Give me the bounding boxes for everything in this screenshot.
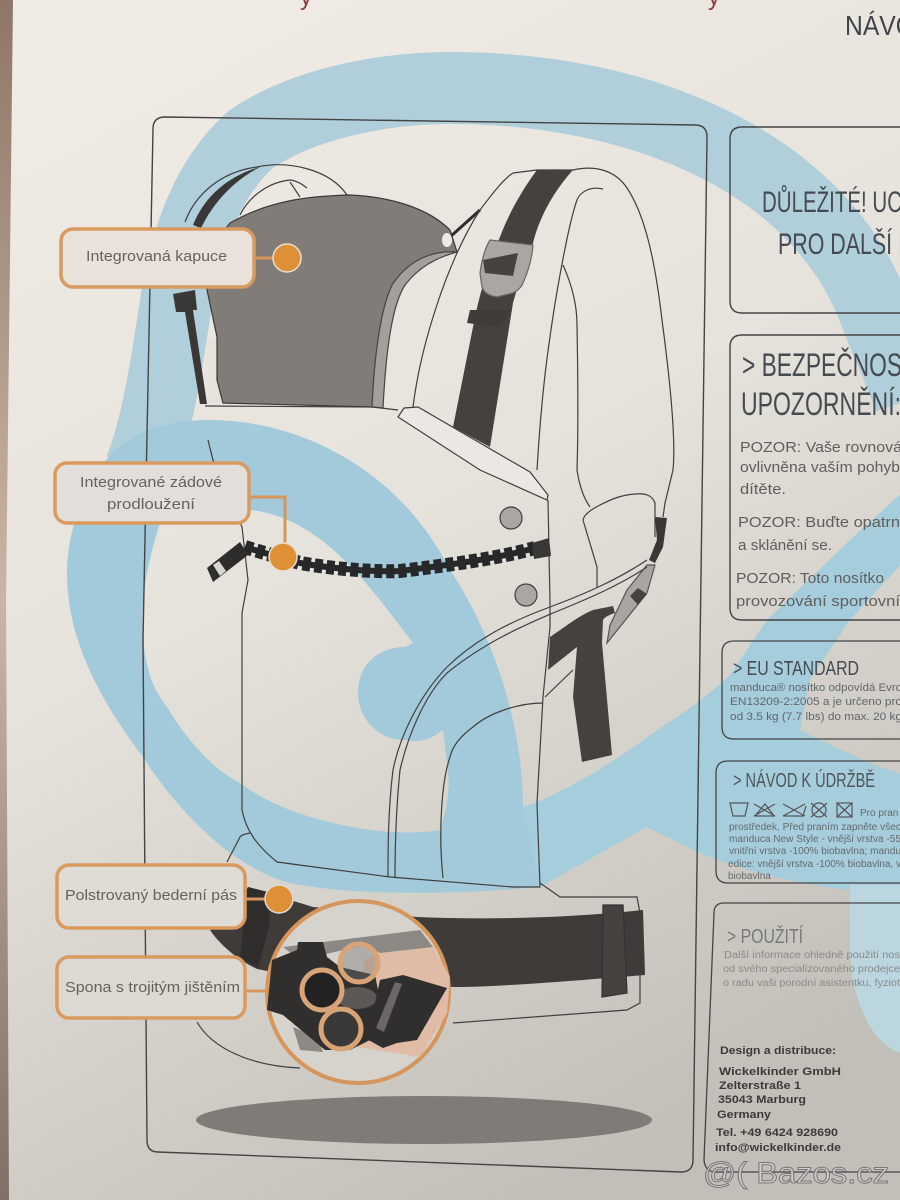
illustration: baby carrier [173, 165, 674, 1068]
side strap top [649, 517, 667, 563]
zipper pull [207, 542, 248, 582]
panel: care instructions: biobavlna [728, 871, 771, 882]
zipper [245, 547, 535, 571]
safety ring: left [302, 970, 342, 1010]
front flap [398, 407, 548, 500]
panel: safety warnings: dítěte. [740, 481, 786, 498]
panel: safety warnings: POZOR: Vaše rovnová [740, 439, 900, 456]
panel: use and distributor: od svého specializovaného prodejce [723, 964, 900, 975]
table edge at the left [0, 0, 13, 1200]
distributor address: Germany [717, 1109, 772, 1121]
hand [357, 947, 450, 1057]
small strap at belt [227, 833, 250, 862]
panel: use and distributor: o radu vaši porodní asistentku, fyziot [723, 978, 900, 989]
panel: use and distributor [704, 903, 900, 1172]
dark buckle left [267, 942, 380, 1050]
panel: use and distributor: > POUŽITÍ [727, 925, 803, 948]
callout: Integrovaná kapuce [61, 229, 301, 287]
distributor address: Design a distribuce: [720, 1045, 836, 1057]
side wing [583, 494, 655, 587]
callout: Polstrovaný bederní pás [57, 865, 293, 928]
panel: EU standard: EN13209-2:2005 a je určeno pro [730, 696, 900, 708]
panel: use and distributor: Další informace ohledně použití nos [724, 950, 900, 961]
lower outline lines [453, 883, 640, 1023]
dark shoulder webbing [453, 170, 573, 447]
strap buckle [480, 240, 533, 297]
distributor address: Zelterstraße 1 [719, 1080, 801, 1092]
panel: care instructions [716, 761, 900, 883]
panel: EU standard: > EU STANDARD [733, 658, 859, 680]
callout: Polstrovaný bederní pás: Polstrovaný bederní pás [65, 887, 237, 904]
blue swirl background [67, 88, 900, 1055]
shadow under carrier [196, 1096, 652, 1144]
panel: safety warnings: ovlivněna vaším pohyb [740, 459, 900, 476]
watermark: Bazos.cz: @( Bazos.cz [703, 1157, 889, 1190]
panel: care instructions: edice: vnější vrstva -100% biobavlna, v [728, 859, 900, 870]
distributor address: info@wickelkinder.de [715, 1142, 841, 1154]
safety ring: bottom [321, 1009, 361, 1049]
distributor address: Tel. +49 6424 928690 [716, 1127, 838, 1139]
snap buttons [500, 507, 522, 529]
side buckle [607, 565, 655, 643]
panel: care instructions: vnitřní vrstva -100% biobavlna; mandu [729, 846, 900, 857]
title fragments cut off at the top [300, 0, 720, 11]
panel: safety warnings: a sklánění se. [738, 537, 832, 554]
detail circle: triple safety buckle [267, 901, 450, 1083]
body panel [205, 406, 550, 887]
shoulder strap outline [413, 168, 674, 517]
distributor address: 35043 Marburg [718, 1094, 806, 1106]
belt loop [602, 905, 627, 997]
side curved seams [388, 560, 647, 877]
panel: care instructions: manduca New Style - vnější vrstva -55 [729, 834, 900, 845]
distributor address [715, 1045, 841, 1154]
panel: care instructions: prostředek. Před praním zapněte všec [729, 822, 900, 833]
panel: safety warnings: provozování sportovní [736, 593, 900, 610]
callout: Integrované zádové prodloužení: Integrované zádové [80, 474, 222, 491]
panel: care instructions: Pro pran [860, 808, 898, 819]
panel: safety warnings: POZOR: Buďte opatrn [738, 514, 900, 531]
icon: care symbols [730, 803, 852, 817]
hanging strap [548, 606, 615, 762]
panel: important notice [730, 127, 900, 313]
dark buckle right [363, 975, 447, 1048]
strap tab [467, 310, 512, 327]
panel: EU standard: manduca® nosítko odpovídá Evro [730, 682, 900, 694]
callout: Integrované zádové prodloužení [55, 463, 297, 571]
callout: Spona s trojitým jištěním: Spona s trojitým jištěním [65, 979, 240, 996]
panel: EU standard: od 3.5 kg (7.7 lbs) do max. 20 kg [730, 711, 900, 723]
callout: Spona s trojitým jištěním [57, 957, 266, 1018]
waist belt [210, 887, 645, 987]
oval button [337, 987, 377, 1009]
inner hood band [372, 252, 457, 408]
integrated hood [207, 195, 457, 407]
hood tie [450, 210, 480, 237]
panel: safety warnings: POZOR: Toto nosítko [736, 570, 884, 587]
distributor address: Wickelkinder GmbH [719, 1066, 841, 1078]
main illustration frame [143, 117, 707, 1172]
panel: safety warnings [730, 335, 900, 620]
paper sliver beside hood [207, 337, 223, 403]
callout: Integrovaná kapuce: Integrovaná kapuce [86, 248, 227, 265]
safety ring: top [340, 944, 378, 982]
hood back arcs [185, 165, 347, 222]
panel: EU standard [722, 641, 900, 739]
grey belt edge [283, 930, 433, 1052]
callout: Integrované zádové prodloužení: prodloužení [107, 496, 196, 513]
strap at left of hood [173, 290, 207, 404]
strap inner lines [537, 188, 603, 470]
